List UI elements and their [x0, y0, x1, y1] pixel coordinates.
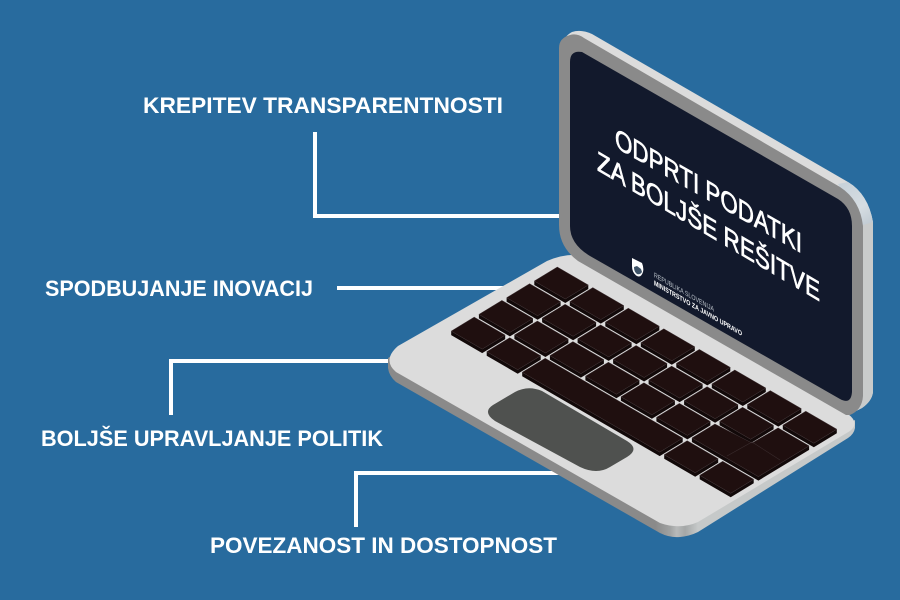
icon: Slovenian coat of arms [632, 258, 643, 276]
connector: innovation [337, 286, 510, 290]
keyboard [451, 267, 837, 497]
laptop base [388, 255, 855, 537]
label: innovation: SPODBUJANJE INOVACIJ [45, 276, 313, 301]
connector: accessibility [356, 473, 560, 527]
label: connectivity and accessibility: POVEZANOST IN DOSTOPNOST [210, 533, 557, 558]
ministry name: REPUBLIKA SLOVENIJA [654, 271, 715, 314]
ministry name: MINISTRSTVO ZA JAVNO UPRAVO [654, 279, 742, 338]
connector: transparency [315, 132, 560, 216]
connector: policy management [171, 361, 395, 415]
laptop lid [559, 31, 873, 416]
trackpad [488, 388, 634, 471]
screen headline: ODPRTI PODATKI [615, 123, 802, 260]
label: transparency: KREPITEV TRANSPARENTNOSTI [143, 93, 503, 118]
laptop illustration [388, 31, 873, 537]
label: policy management: BOLJŠE UPRAVLJANJE POLITIK [41, 426, 384, 451]
screen headline: ZA BOLJŠE REŠITVE [597, 145, 820, 308]
screen [570, 52, 852, 401]
